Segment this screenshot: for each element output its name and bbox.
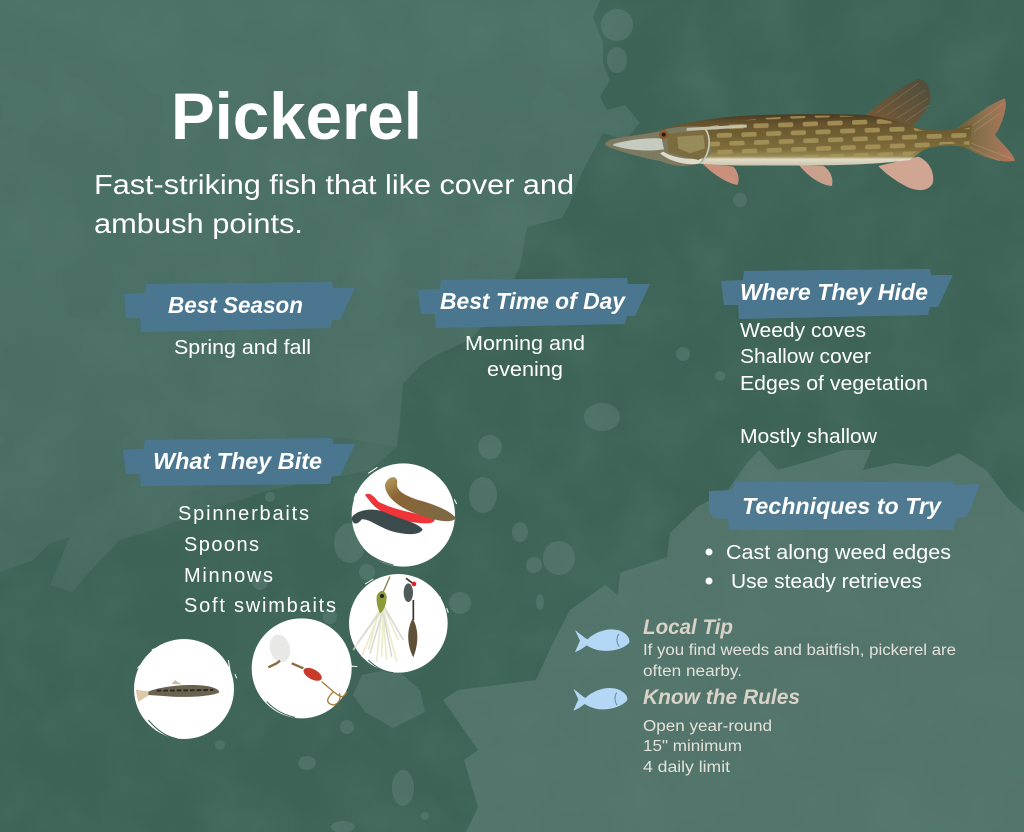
banner: techniques to try: Techniques to Try <box>742 493 942 519</box>
banner: where they hide: Where They Hide <box>740 279 928 305</box>
text: lure list: Spoons <box>184 534 259 556</box>
red body <box>301 665 324 683</box>
subtitle: ambush points. <box>94 208 303 239</box>
text: local tip: Local Tip <box>643 616 733 639</box>
tail fin <box>957 98 1015 161</box>
text: know the rules: Open year-round <box>643 718 772 735</box>
text: techniques list <box>706 542 951 593</box>
photo: spoon lure <box>252 618 357 718</box>
text: lure list: Minnows <box>184 565 273 587</box>
text: best time value: Morning and <box>465 333 585 355</box>
banner: techniques to try <box>709 482 980 530</box>
title: Pickerel <box>171 79 422 153</box>
banner: where they hide <box>721 269 953 319</box>
blade <box>408 618 417 657</box>
text: techniques list: Use steady retrieves <box>731 571 922 593</box>
fish body <box>605 114 972 166</box>
text: lure list: Soft swimbaits <box>184 595 336 617</box>
text: best season value: Spring and fall <box>174 337 311 359</box>
text: lure list <box>178 503 336 617</box>
dorsal fin <box>866 79 930 126</box>
text: know the rules <box>643 686 800 776</box>
icon: fish, know the rules <box>573 688 627 711</box>
red lure <box>365 494 435 523</box>
text: where they hide list: Shallow cover <box>740 346 871 368</box>
text: local tip: If you find weeds and baitfish, pickerel are <box>643 642 956 659</box>
text: where they hide list: Weedy coves <box>740 320 866 342</box>
banner: best season: Best Season <box>168 292 303 318</box>
banner: what they bite <box>123 438 355 486</box>
dark lure <box>352 510 423 534</box>
banner: best time of day <box>418 278 650 328</box>
subtitle: Fast-striking fish that like cover and <box>94 169 574 200</box>
body scale pattern <box>708 116 970 158</box>
text: know the rules: 4 daily limit <box>643 759 731 776</box>
photo: spinnerbait <box>349 574 448 673</box>
photo: minnow <box>134 639 237 739</box>
banner: best time of day: Best Time of Day <box>440 288 626 314</box>
banner: best season <box>124 282 355 332</box>
text: local tip <box>643 616 956 680</box>
brown lure <box>385 477 456 521</box>
photo: soft plastic lures <box>352 463 457 567</box>
text: where they hide list <box>740 320 928 448</box>
belly fins <box>702 163 739 185</box>
illustration: pickerel fish <box>605 79 1015 190</box>
skirt <box>353 607 403 662</box>
head <box>605 126 712 166</box>
text: where they hide list: Edges of vegetation <box>740 373 928 395</box>
icon: fish, local tip <box>575 629 629 652</box>
text: techniques list: Cast along weed edges <box>726 542 951 564</box>
text: lure list: Spinnerbaits <box>178 503 309 525</box>
text: know the rules: Know the Rules <box>643 686 800 709</box>
text: where they hide list: Mostly shallow <box>740 426 878 448</box>
text: best time value: evening <box>487 359 563 381</box>
text: best time value <box>465 333 585 381</box>
banner: what they bite: What They Bite <box>153 448 322 474</box>
text: know the rules: 15" minimum <box>643 738 742 755</box>
subtitle <box>94 169 574 239</box>
text: local tip: often nearby. <box>643 663 742 680</box>
